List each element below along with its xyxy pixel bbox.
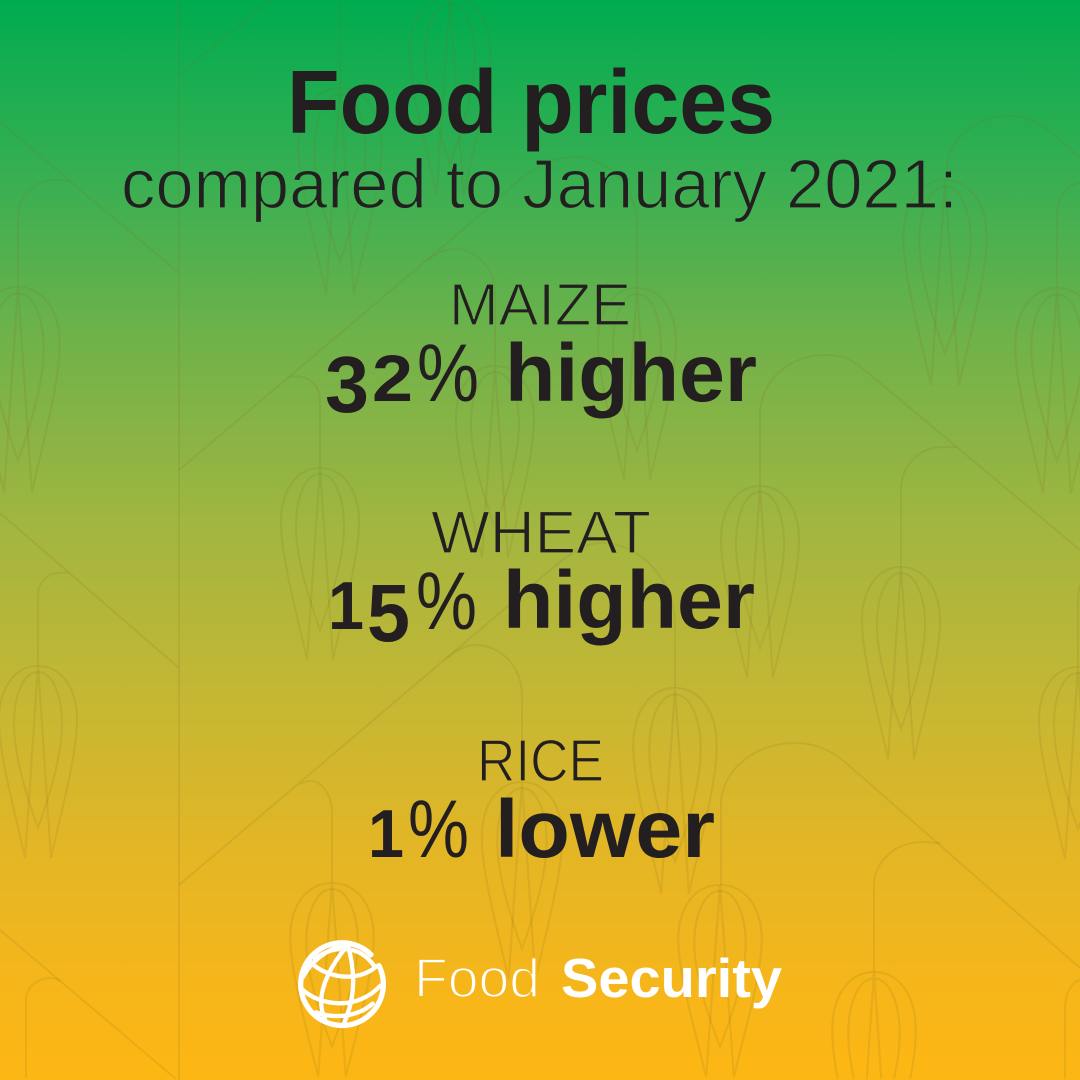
icon: globe logo [301,943,383,1025]
brand word light: Food [414,947,540,1009]
wheat label: WHEAT [431,499,651,566]
maize value [325,328,757,429]
maize value: 3 [325,340,369,429]
wheat value: higher [503,555,755,646]
brand word bold: Security [561,947,782,1009]
wheat value [328,555,755,659]
maize value: 2 [372,341,413,415]
wheat value: 1 [328,568,364,644]
footer brand: Food Security [414,947,782,1009]
maize value: % [417,328,479,419]
stat: maize [325,272,757,429]
maize label: MAIZE [449,272,631,338]
maize value: higher [505,328,757,419]
rice label: RICE [477,728,604,794]
title: Food prices [287,53,775,153]
stat: rice [368,728,715,875]
rice value: % [408,784,469,875]
rice value: 1 [368,796,404,872]
rice value: lower [495,784,715,875]
wheat value: % [416,556,477,647]
stat: wheat [328,499,755,659]
wheat value: 5 [367,568,410,659]
subtitle: compared to January 2021: [121,145,958,223]
rice value [368,784,715,875]
